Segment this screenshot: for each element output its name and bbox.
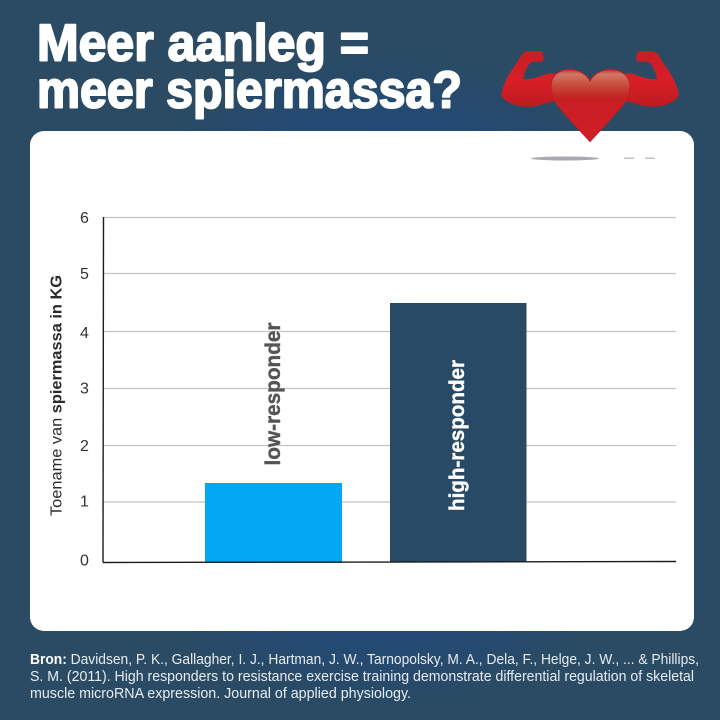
- y-axis tick labels: [80, 210, 89, 570]
- y-axis tick labels: 1: [80, 494, 89, 510]
- icon: left flexed arm: [501, 51, 566, 107]
- y-axis tick labels: 2: [80, 438, 89, 455]
- bar chart: [48, 210, 676, 570]
- y-axis tick labels: 3: [80, 380, 89, 398]
- y-axis title: Toename van spiermassa in KG: [48, 275, 66, 516]
- y-axis tick labels: 5: [80, 266, 89, 283]
- label: low-responder: low-responder: [262, 322, 285, 466]
- source citation: [30, 652, 699, 702]
- bar: high-responder: [390, 303, 526, 562]
- label: high-responder: high-responder: [446, 360, 469, 511]
- title: [37, 14, 462, 120]
- y-axis tick labels: 4: [80, 325, 89, 342]
- title: meer spiermassa?: [37, 62, 462, 120]
- panel: chart card: [30, 131, 694, 631]
- smudge marks: [531, 156, 655, 160]
- source citation: S. M. (2011). High responders to resistance exercise training demonstrate differential regulation of skeletal: [30, 669, 694, 685]
- icon: heart: [551, 69, 630, 142]
- icon: right flexed arm: [614, 51, 679, 107]
- y-axis tick labels: 0: [80, 552, 89, 570]
- axes: [103, 217, 676, 562]
- y-axis tick labels: 6: [80, 210, 89, 227]
- bar: low-responder: [205, 483, 342, 563]
- source citation: Bron: Davidsen, P. K., Gallagher, I. J., Hartman, J. W., Tarnopolsky, M. A., Dela, F., Helge, J. W., ... & Phillips,: [30, 652, 699, 668]
- icon: flexing heart: [501, 51, 679, 142]
- title: Meer aanleg =: [37, 14, 369, 72]
- grid lines: [103, 218, 676, 502]
- source citation: muscle microRNA expression. Journal of applied physiology.: [30, 686, 411, 702]
